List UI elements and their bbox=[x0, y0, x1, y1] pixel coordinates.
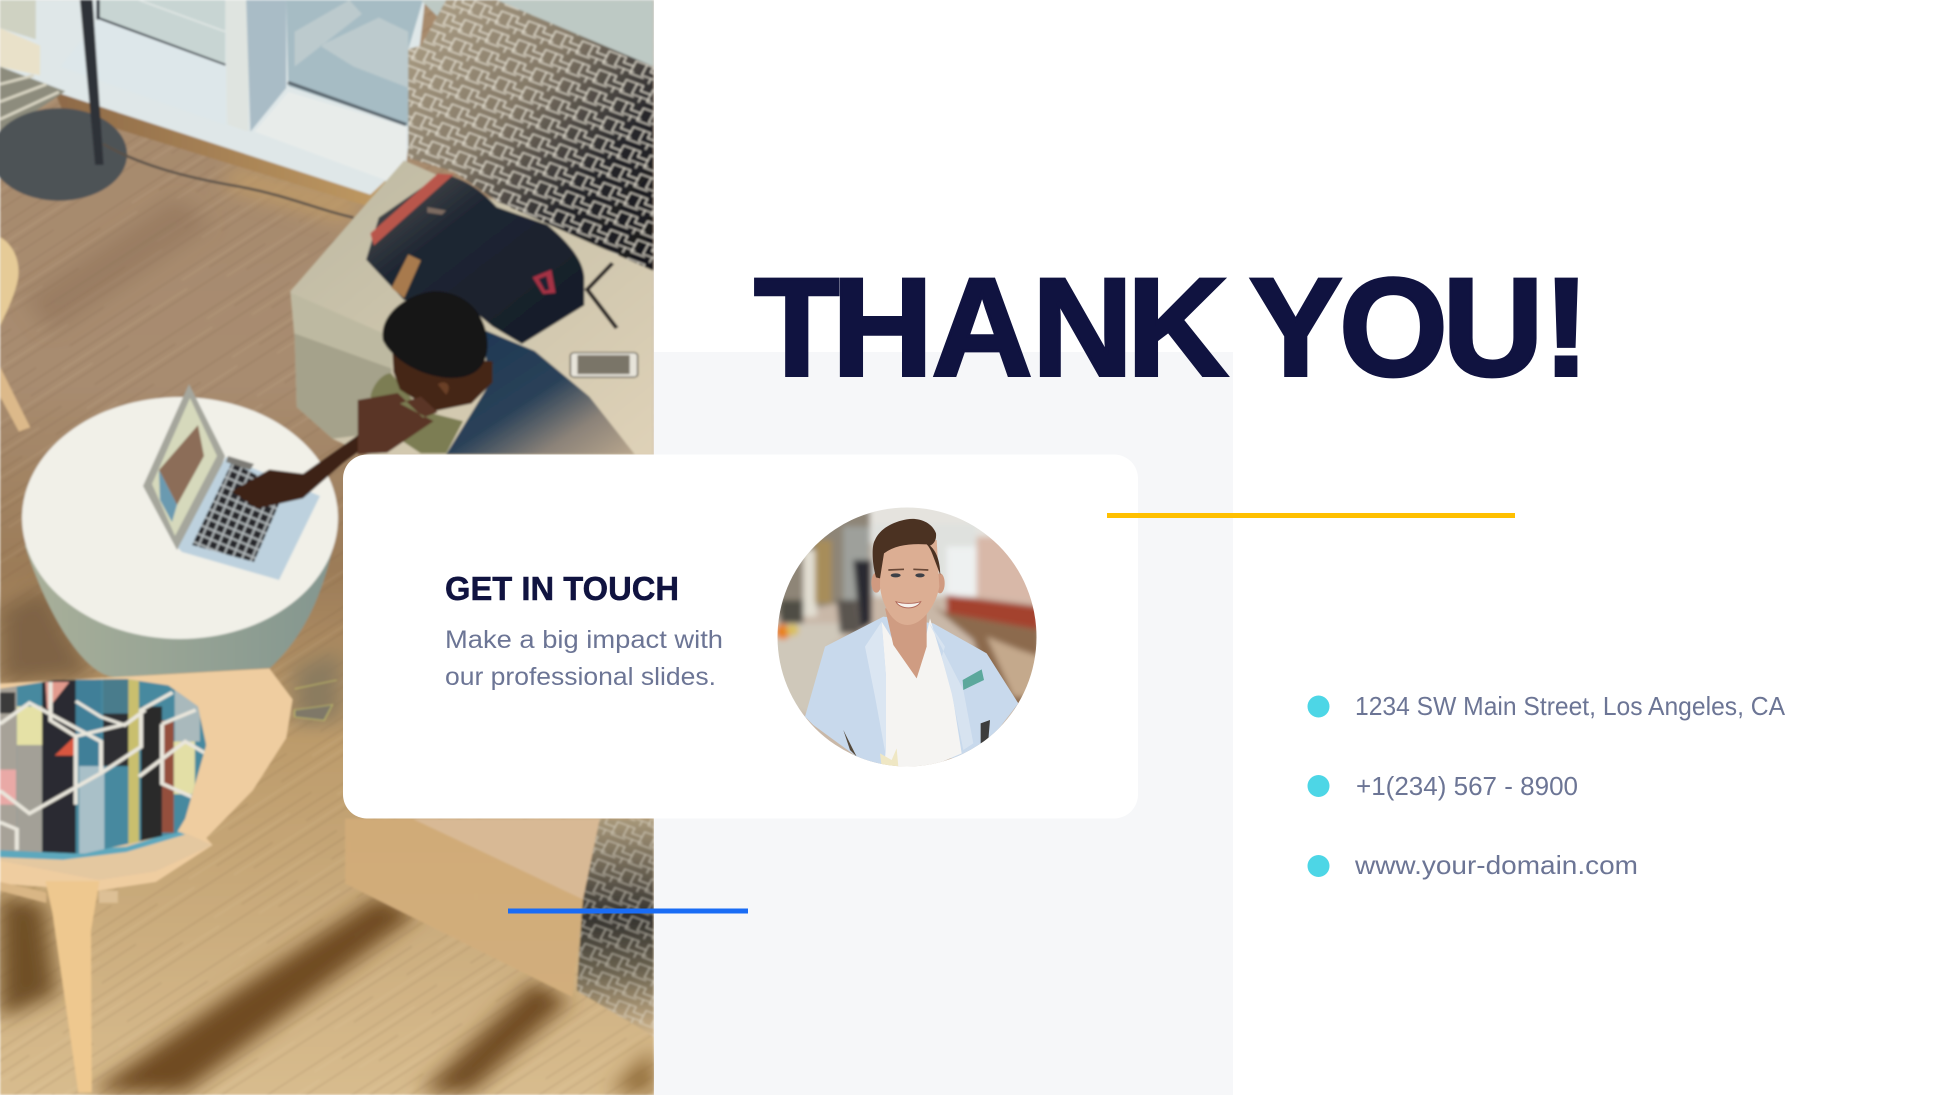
neck bbox=[885, 608, 927, 678]
smile bbox=[896, 602, 921, 608]
man's arms and hand bbox=[231, 393, 438, 509]
accent line: blue bbox=[508, 908, 748, 914]
accent line: yellow bbox=[1107, 513, 1515, 518]
cushion pattern bbox=[0, 678, 210, 854]
chair leg bbox=[45, 881, 99, 1092]
contact: address: 1234 SW Main Street, Los Angeles, CA bbox=[1355, 691, 1786, 721]
lamp bbox=[0, 108, 127, 201]
sofa bbox=[290, 160, 654, 456]
cushion rim bbox=[1, 834, 209, 879]
text: card description: Make a big impact with bbox=[445, 626, 723, 654]
shirt bbox=[882, 618, 962, 768]
lower scene: chair and ottoman base bbox=[0, 669, 654, 1092]
title: thank you: THANK YOU! bbox=[754, 248, 1590, 406]
heading: get in touch: GET IN TOUCH bbox=[445, 570, 679, 607]
chair edge bbox=[0, 237, 19, 326]
face bbox=[880, 540, 939, 625]
eyes bbox=[891, 573, 901, 577]
photo: man working on a laptop in a lounge bbox=[0, 0, 654, 1095]
backpack bbox=[366, 174, 584, 344]
panel: light grey backdrop bbox=[654, 352, 1233, 1095]
upper scene: window wall and ottoman bbox=[0, 0, 654, 456]
hair bbox=[873, 519, 940, 578]
ottoman bbox=[408, 0, 654, 271]
blazer bbox=[805, 617, 1018, 770]
soft floor bands bbox=[0, 587, 654, 1092]
ears bbox=[871, 573, 881, 593]
pocket square bbox=[963, 669, 984, 690]
box bbox=[345, 819, 600, 997]
chair shell bbox=[0, 669, 293, 891]
blurred restaurant background bbox=[773, 503, 1040, 770]
contact list bbox=[1308, 691, 1786, 880]
table with laptop bbox=[22, 384, 338, 677]
card: get in touch bbox=[343, 454, 1138, 818]
man bbox=[446, 330, 635, 454]
portrait photo: smiling man in pale blue blazer bbox=[773, 503, 1040, 770]
text: card description bbox=[445, 626, 723, 691]
contact: phone: +1(234) 567 - 8900 bbox=[1356, 771, 1578, 801]
contact: website: www.your-domain.com bbox=[1354, 850, 1638, 880]
text: card description: our professional slides. bbox=[445, 663, 716, 691]
phone bbox=[570, 353, 638, 377]
